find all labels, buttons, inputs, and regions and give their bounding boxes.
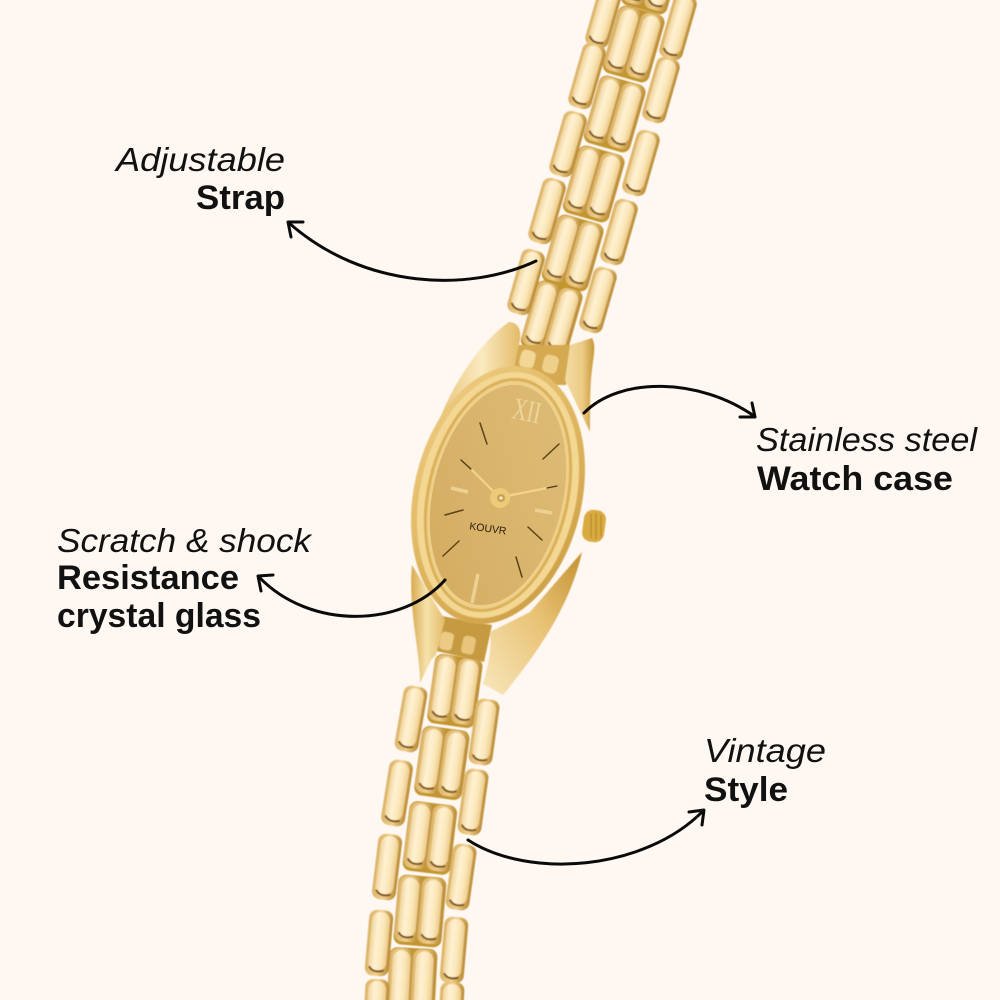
watch lugs (411, 322, 594, 695)
arrow: watch case (584, 386, 755, 417)
label: vintage style (704, 732, 826, 809)
crown (581, 509, 607, 543)
label: adjustable strap: Adjustable (114, 141, 285, 178)
label: adjustable strap: Strap (196, 179, 285, 217)
gold batons (451, 488, 552, 603)
brand name: KOUVR (469, 520, 508, 538)
label: stainless steel watch case (756, 421, 979, 498)
arrow: crystal glass (258, 575, 445, 616)
label: scratch and shock resistance: Resistance (57, 559, 239, 597)
watch case (387, 348, 609, 642)
upper right lug (565, 338, 594, 432)
label: adjustable strap (114, 141, 285, 217)
label: vintage style: Style (704, 771, 788, 809)
numeral XII: XII (510, 390, 544, 431)
label: stainless steel watch case: Stainless steel (756, 421, 979, 458)
label: scratch and shock resistance: Scratch & shock (57, 522, 313, 559)
centre bars (505, 345, 572, 385)
label: vintage style: Vintage (704, 732, 826, 769)
arrow: vintage style (468, 810, 704, 864)
lower right lug (483, 552, 582, 695)
label: stainless steel watch case: Watch case (757, 460, 953, 498)
lower left lug (411, 565, 445, 683)
hands (461, 460, 557, 497)
centre hub (490, 488, 510, 508)
upper left lug (434, 322, 520, 440)
label: scratch and shock resistance: crystal glass (57, 597, 261, 635)
hour ticks (443, 423, 559, 577)
bracelet: lower strap (362, 653, 500, 1000)
bracelet: upper strap (505, 0, 699, 359)
arrow: adjustable strap (288, 222, 536, 280)
watch dial (409, 371, 587, 619)
label: scratch and shock resistance (57, 522, 313, 635)
